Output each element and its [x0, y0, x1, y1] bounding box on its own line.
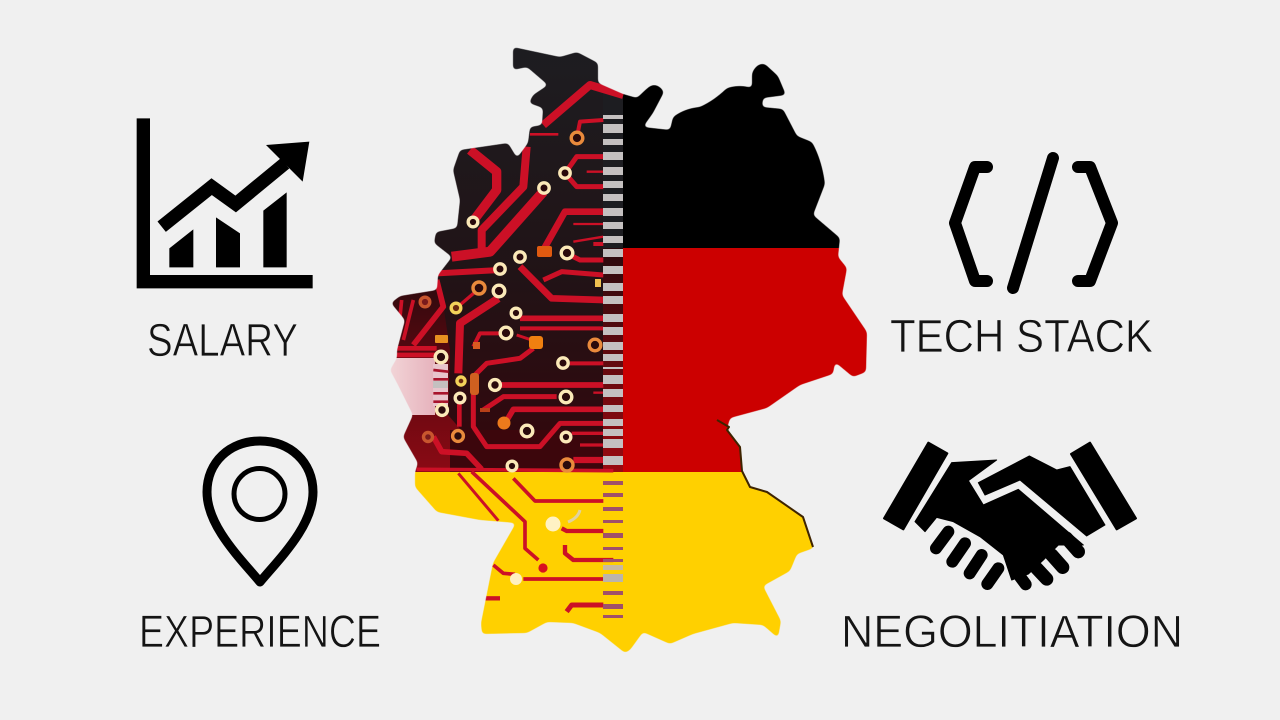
connector teeth along seam	[433, 115, 623, 618]
circuit traces upper	[397, 85, 623, 373]
circuit traces lower	[397, 348, 613, 612]
pink faded area	[385, 358, 448, 415]
flag stripe: black	[623, 64, 840, 248]
flag stripe: red	[623, 248, 868, 472]
icon: location pin	[207, 441, 313, 582]
orange chip blocks	[435, 246, 601, 430]
label: experience: EXPERIENCE	[139, 606, 381, 657]
label: salary: SALARY	[147, 314, 298, 366]
gold stripe solder glows	[510, 510, 580, 585]
icon: salary growth chart	[137, 118, 313, 288]
circuit pads and solder points	[420, 132, 601, 471]
label: negotiation: NEGOLITIATION	[841, 606, 1183, 657]
icon: handshake	[884, 443, 1136, 584]
icon: code brackets	[955, 158, 1112, 288]
label: tech stack: TECH STACK	[890, 310, 1153, 362]
flag stripe: gold	[414, 472, 813, 652]
Germany map	[380, 40, 880, 662]
infographic canvas	[136, 48, 1180, 652]
circuit board dark background	[380, 40, 623, 472]
shaded border edge	[717, 420, 813, 547]
